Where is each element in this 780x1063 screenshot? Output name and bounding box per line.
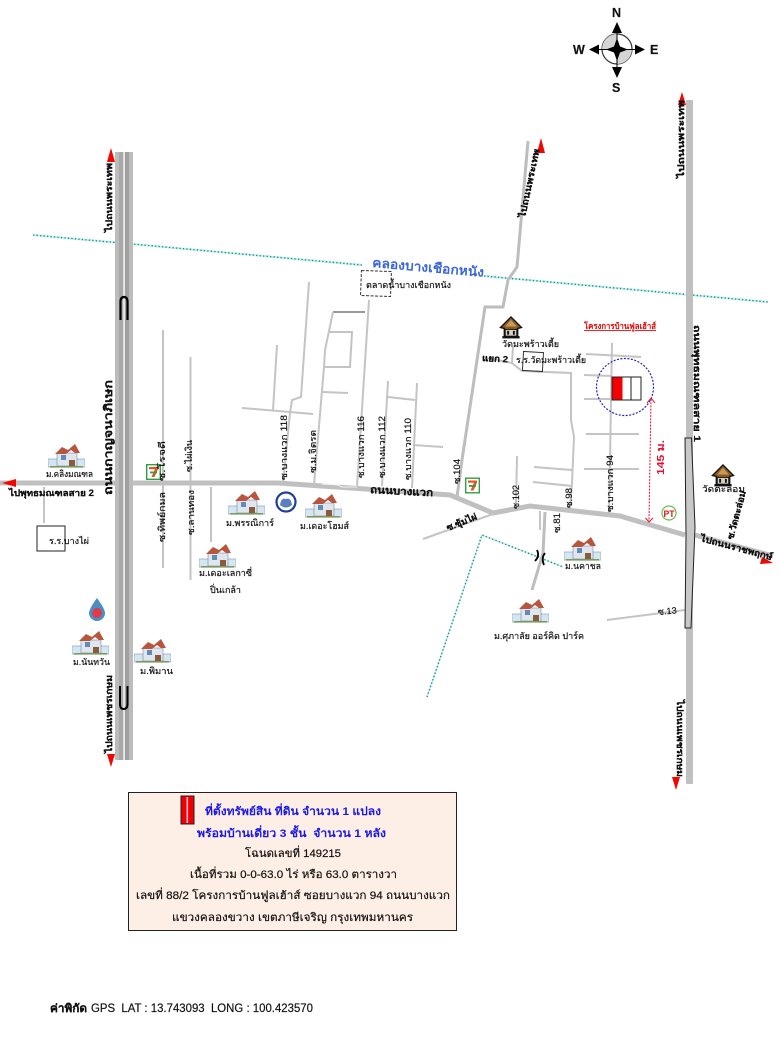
legend details bbox=[136, 845, 450, 924]
road labels: ซ.104 bbox=[452, 459, 462, 484]
place labels: วัดมะพร้าวเตี้ย bbox=[502, 337, 559, 349]
legend details: แขวงคลองขวาง เขตภาษีเจริญ กรุงเทพมหานคร bbox=[172, 911, 413, 924]
label: project name: โครงการบ้านฟูลเฮ้าส์ bbox=[583, 321, 657, 332]
icon: 7-Eleven west bbox=[147, 465, 160, 479]
place labels: ร.ร.บางไผ่ bbox=[49, 536, 89, 546]
icon: canal bridge bbox=[535, 550, 545, 565]
road labels: ซ.บางแวก 116 bbox=[356, 416, 366, 478]
label: canal name: คลองบางเชือกหนัง bbox=[372, 255, 485, 280]
market box bbox=[361, 270, 391, 297]
road labels: ไปถนนเพชรเกษม bbox=[675, 699, 686, 777]
GPS coordinates: GPS LAT : 13.743093 LONG : 100.423570 bbox=[91, 1003, 313, 1015]
road labels: ซ.บางแวก 118 bbox=[279, 415, 289, 480]
road: Kanchanaphisek highway bbox=[115, 152, 133, 760]
road labels: ไปถนนพระเทพ bbox=[516, 148, 542, 220]
legend heading: ที่ตั้งทรัพย์สิน ที่ดิน จำนวน 1 แปลง bbox=[205, 803, 381, 818]
road labels bbox=[8, 100, 774, 777]
icon: bank logo bbox=[276, 492, 296, 512]
legend heading: พร้อมบ้านเดี่ยว 3 ชั้น จำนวน 1 หลัง bbox=[197, 825, 386, 840]
compass: N bbox=[612, 6, 621, 20]
school box: Wat Maphrao Tia bbox=[522, 351, 543, 372]
place labels bbox=[46, 278, 745, 676]
icon: PT fuel station: PT bbox=[664, 509, 675, 519]
road labels: ซ.81 bbox=[552, 513, 562, 533]
road labels: ไปถนนราชพฤกษ์ bbox=[698, 532, 774, 562]
icons: housing estates bbox=[48, 444, 601, 663]
road labels: ซ.ไผ่เงิน bbox=[184, 440, 194, 472]
road labels: ถนนพุทธมณฑลสาย 1 bbox=[691, 325, 702, 442]
road labels: ซ.บางแวก 94 bbox=[605, 455, 615, 512]
icon: 7-Eleven east bbox=[466, 478, 479, 493]
place labels: ตลาดน้ำบางเชือกหนัง bbox=[366, 278, 451, 290]
place labels: ม.ศุภาลัย ออร์คิด ปาร์ค bbox=[494, 630, 584, 642]
legend details: โฉนดเลขที่ 149215 bbox=[245, 845, 341, 860]
place labels: ม.เดอะเลกาซี่ bbox=[199, 566, 252, 578]
road labels: ไปถนนพระเทพ bbox=[675, 100, 686, 179]
road labels: ไปถนนพระเทพ bbox=[103, 163, 114, 233]
distance arrow: 145 m: 145 ม. bbox=[656, 440, 667, 475]
place labels: ร.ร.วัดมะพร้าวเตี้ย bbox=[516, 353, 586, 365]
road labels: ซ.ทิพย์กมล bbox=[156, 492, 167, 542]
compass bbox=[573, 6, 658, 95]
road labels: ถนนกาญจนาภิเษก bbox=[102, 380, 115, 495]
place labels: ปิ่นเกล้า bbox=[210, 583, 241, 595]
school box: Bang Phai bbox=[37, 526, 65, 551]
compass: S bbox=[612, 81, 620, 95]
road labels: ซ.ม.จิตรต bbox=[308, 430, 318, 473]
place labels: ม.เดอะโฮมส์ bbox=[300, 520, 349, 531]
canal: southern branch bbox=[427, 535, 563, 697]
legend details: เลขที่ 88/2 โครงการบ้านฟูลเฮ้าส์ ซอยบางแวก 94 ถนนบางแวก bbox=[136, 887, 450, 902]
road labels: ซ.ซุ้มไผ่ bbox=[445, 511, 479, 534]
road labels: ซ.98 bbox=[564, 488, 574, 508]
icon: U-turn north bbox=[120, 297, 128, 320]
road labels: แยก 2 bbox=[482, 353, 508, 364]
compass: E bbox=[650, 43, 658, 57]
icon: U-turn south bbox=[120, 686, 128, 709]
GPS coordinates: ค่าพิกัด bbox=[50, 1002, 87, 1015]
arrows: road direction bbox=[2, 92, 773, 790]
minor road network bbox=[44, 141, 685, 620]
road labels: ซ.13 bbox=[657, 605, 677, 617]
subject plot marker bbox=[596, 358, 654, 416]
road labels: ซ.ลานทอง bbox=[186, 490, 196, 535]
legend panel bbox=[128, 792, 456, 930]
distance arrow: 145 m bbox=[646, 398, 667, 522]
legend details: เนื้อที่รวม 0-0-63.0 ไร่ หรือ 63.0 ตารางวา bbox=[190, 866, 397, 881]
place labels: ม.พรรณิการ์ bbox=[226, 517, 274, 528]
road: Phutthamonthon Sai 1 bbox=[686, 100, 693, 784]
bridge overpass bbox=[685, 438, 695, 628]
canal: Khlong Bang Chueak Nang bbox=[33, 235, 768, 302]
place labels: ม.พิมาน bbox=[140, 666, 173, 676]
icon: temple Wat Tasom bbox=[712, 465, 734, 486]
place labels: ม.นคาชล bbox=[565, 561, 601, 571]
icon: PTT fuel drop bbox=[89, 598, 105, 621]
road labels: ไปถนนเพชรเกษม bbox=[103, 675, 114, 754]
icon: PT fuel station bbox=[662, 506, 676, 520]
road: Bang Waek main road bbox=[0, 483, 773, 556]
road labels: ซ.บางแวก 110 bbox=[403, 418, 413, 480]
road labels: ไปพุทธมณฑลสาย 2 bbox=[8, 487, 94, 499]
place labels: วัดตะล่อม bbox=[702, 484, 745, 494]
place labels: ม.นันทวัน bbox=[73, 657, 110, 667]
legend heading bbox=[197, 803, 386, 840]
icon: temple Wat Maphrao Tia bbox=[500, 317, 522, 338]
compass: W bbox=[573, 43, 585, 57]
road labels: ซ.วัดตะล่อม bbox=[725, 490, 748, 541]
road labels: ซ.บางแวก 112 bbox=[377, 416, 387, 478]
road labels: ซ.โรจดี bbox=[157, 441, 167, 481]
place labels: ม.คลิงมณฑล bbox=[46, 469, 93, 479]
road labels: ถนนบางแวก bbox=[370, 484, 433, 499]
legend symbol bbox=[181, 796, 194, 824]
road labels: ซ.102 bbox=[511, 485, 521, 509]
